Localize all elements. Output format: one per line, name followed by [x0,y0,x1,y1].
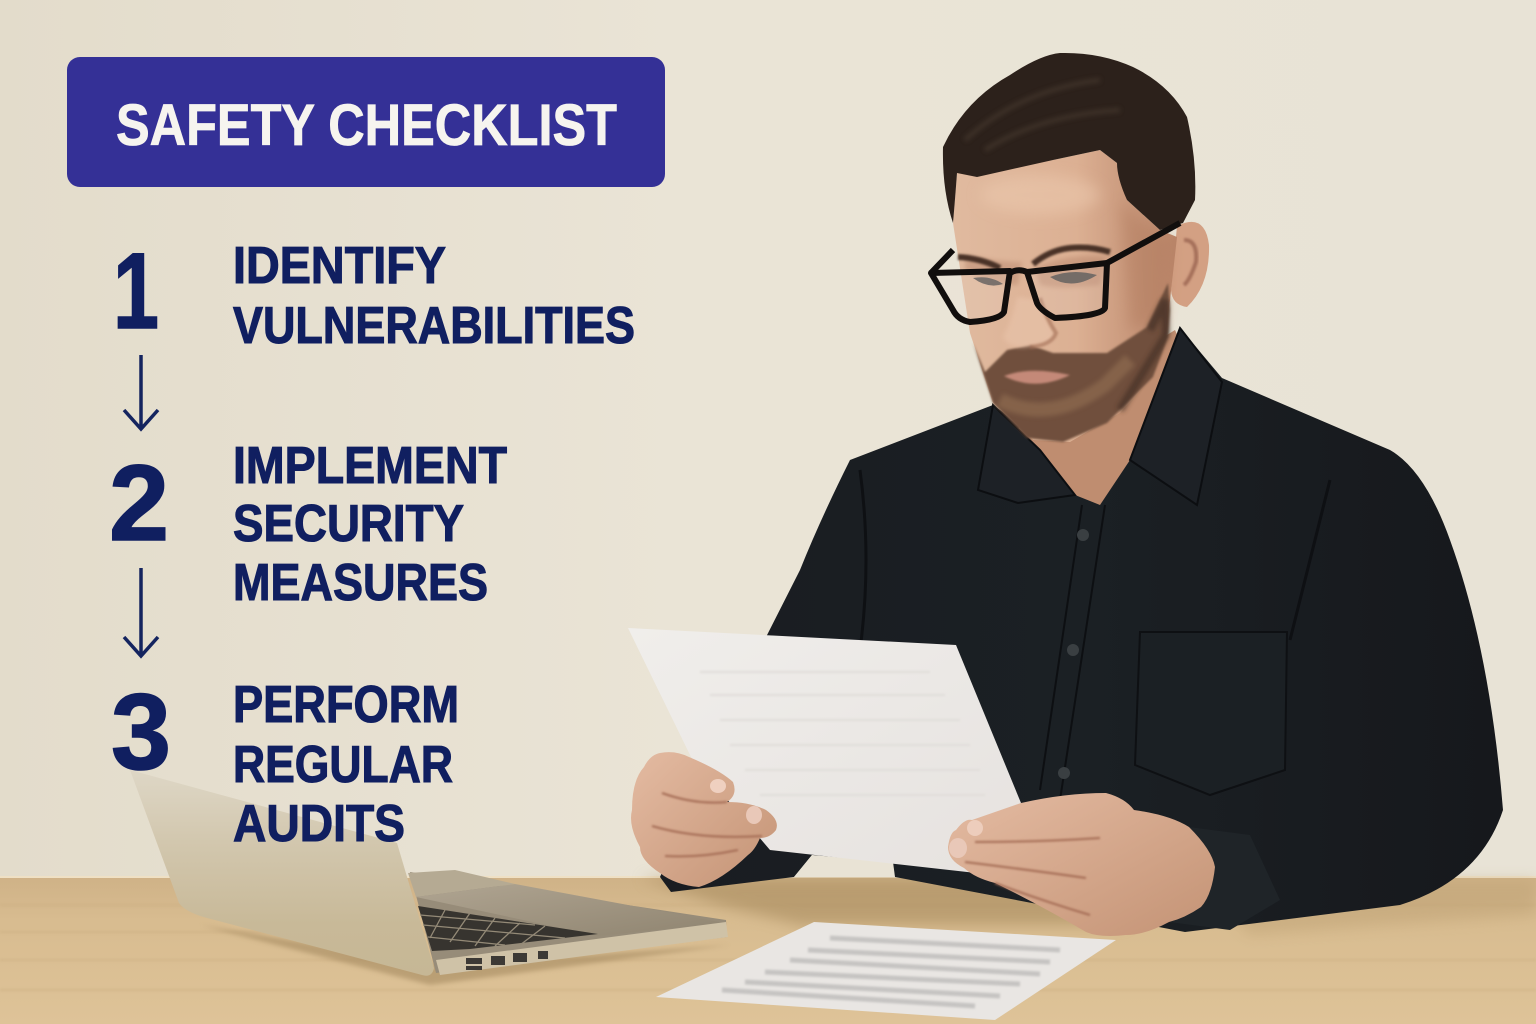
step 2 label: IMPLEMENT [233,437,507,495]
nose [1003,297,1056,347]
glasses [931,223,1180,322]
ear [1171,222,1209,307]
hair [943,53,1195,230]
title banner: SAFETY CHECKLIST [116,93,617,158]
man [660,53,1503,932]
held paper [628,628,1021,873]
right arm cuff [1169,827,1280,930]
right hand [948,793,1215,936]
eyes [973,272,1097,286]
face [953,150,1177,442]
step 3 number: 3 [111,671,171,792]
step 2 label: SECURITY [233,495,464,553]
paper on table [656,922,1116,1020]
step 3 label: PERFORM [233,676,459,734]
arrow 1 to 2 [124,355,158,429]
laptop base [408,870,728,975]
step 2 label [233,437,507,612]
wooden table [0,876,1536,1024]
dark shirt [660,328,1503,932]
neck [1015,330,1200,505]
arrow 2 to 3 [124,568,158,656]
step 1 label: VULNERABILITIES [233,297,635,355]
step 1 label: IDENTIFY [233,237,446,295]
step 1 number: 1 [113,230,159,351]
step 3 label: AUDITS [233,795,405,853]
step 3 label [233,676,459,853]
laptop lid [130,770,434,976]
lips [1004,371,1070,384]
step 2 number: 2 [109,442,169,563]
step 3 label: REGULAR [233,736,453,794]
title banner [67,57,665,187]
step 2 label: MEASURES [233,554,488,612]
eyebrows [958,248,1110,268]
left hand [631,752,777,887]
beard [973,283,1170,442]
step 1 label [233,237,635,355]
laptop [130,770,728,976]
shirt collar [978,328,1222,505]
